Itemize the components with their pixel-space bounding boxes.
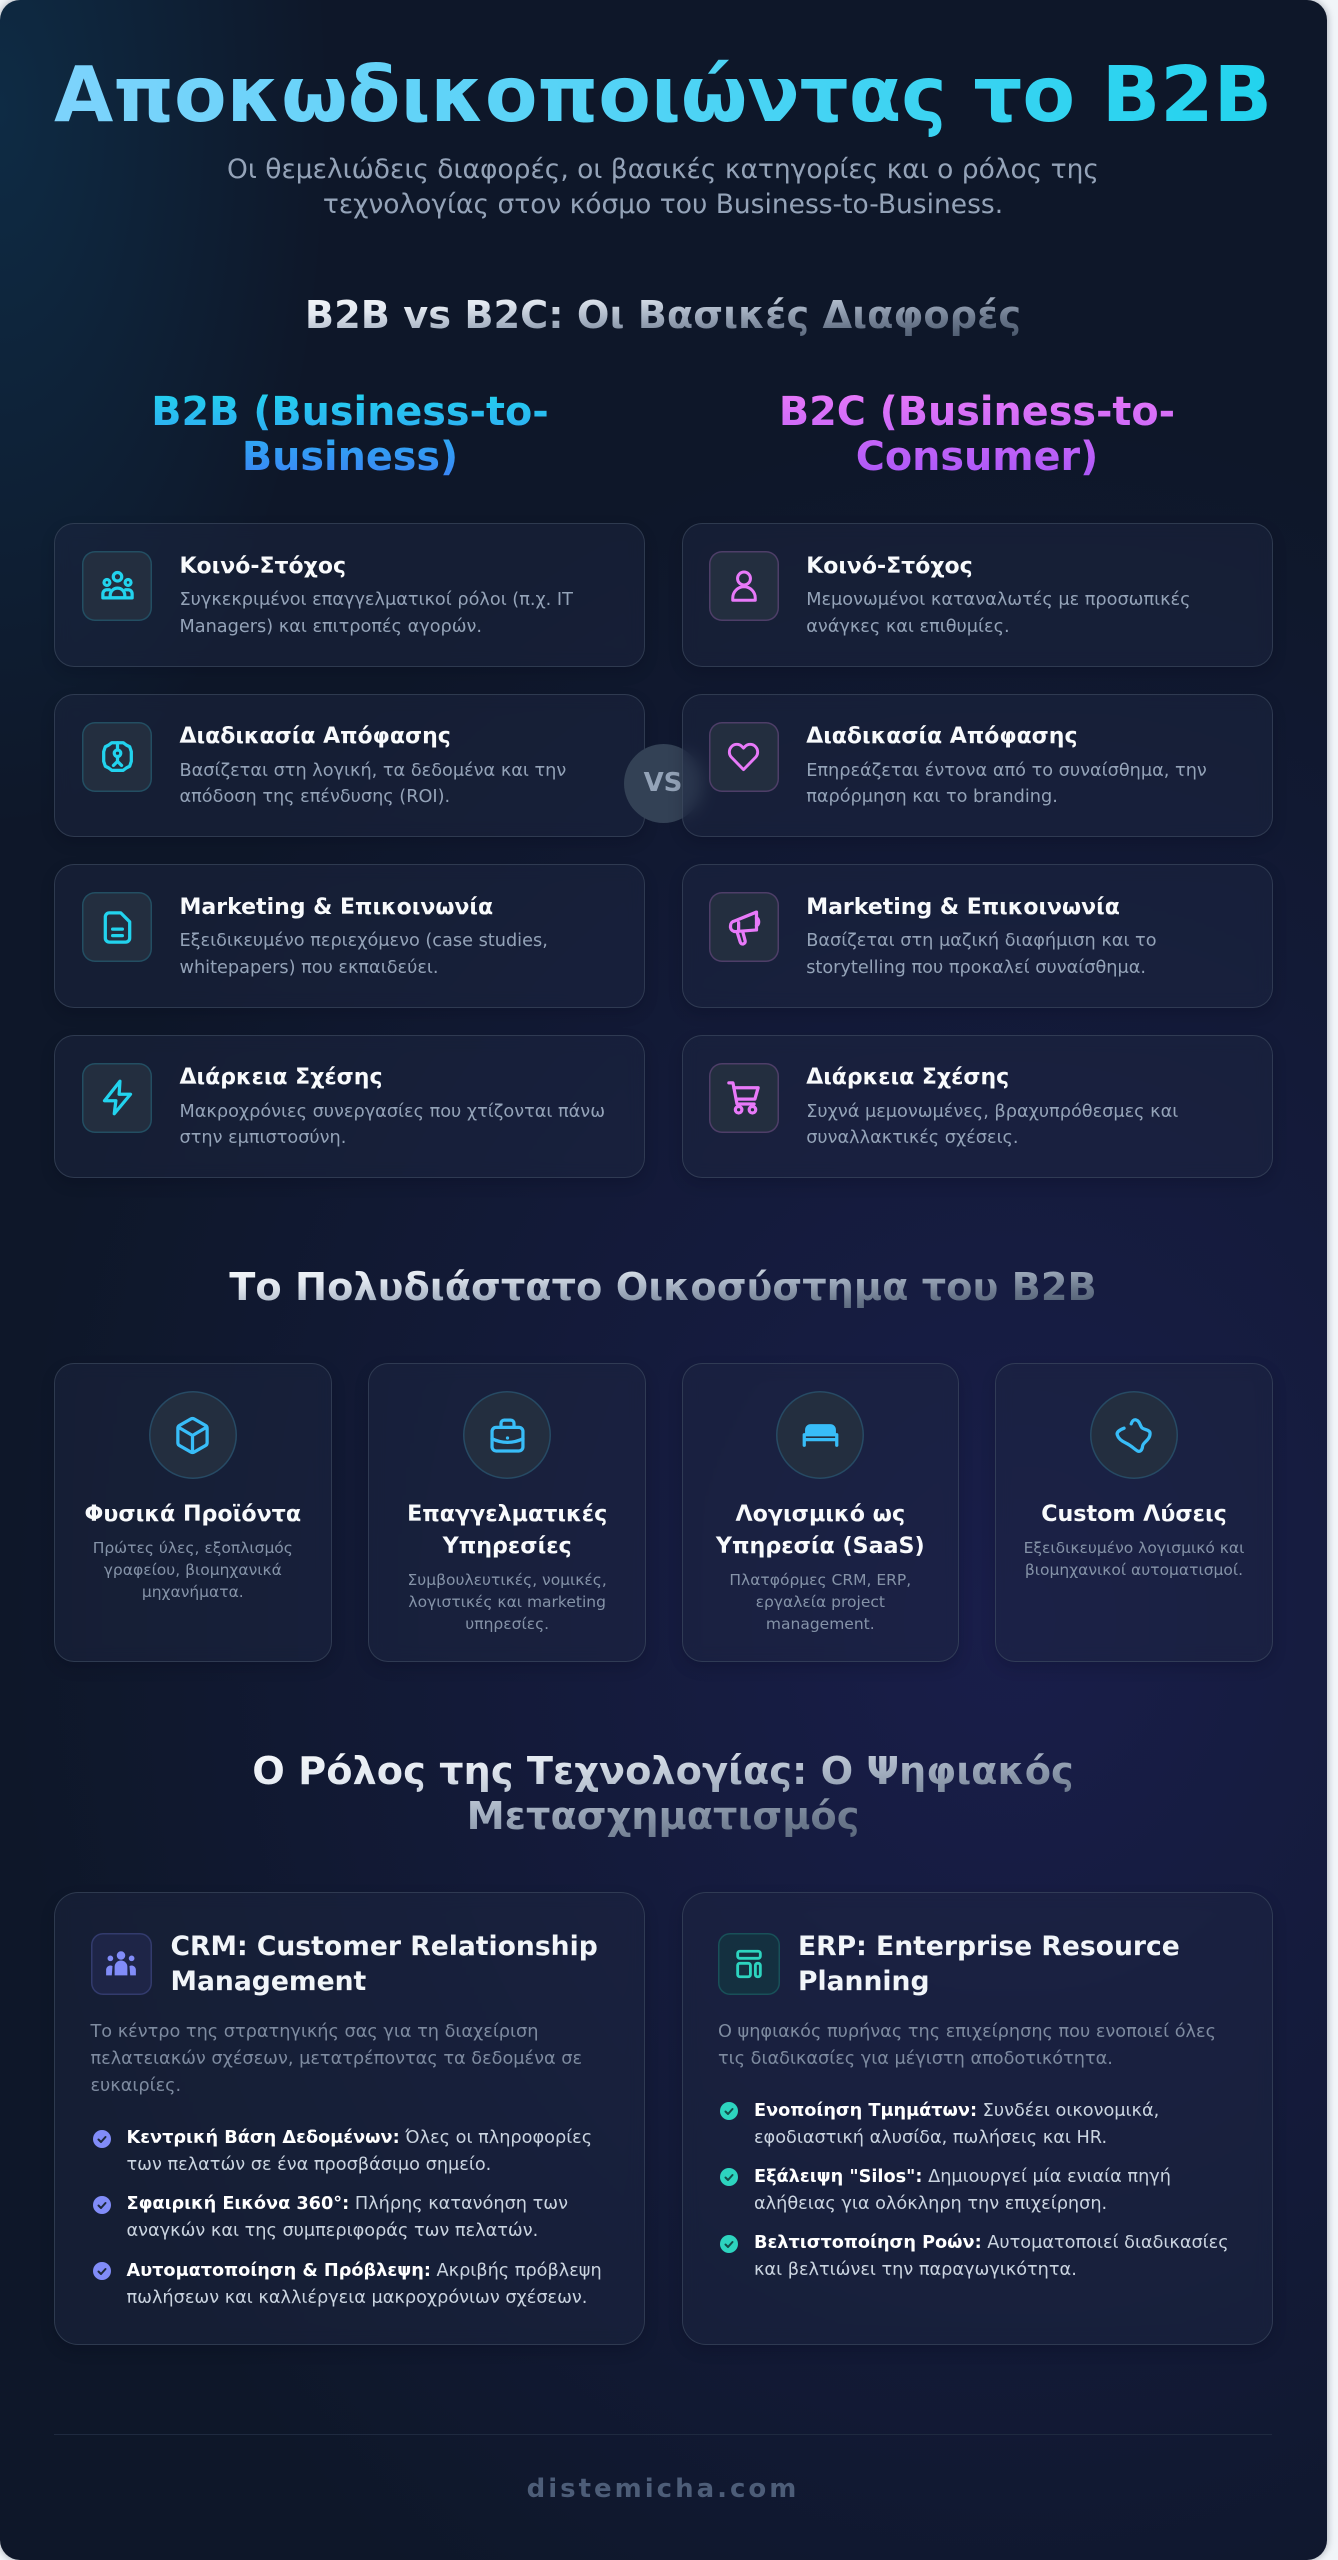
panel description: εργαλεία project: [756, 1593, 885, 1611]
card description: ανάγκες και επιθυμίες.: [806, 617, 1010, 637]
card description: Συχνά μεμονωμένες, βραχυπρόθεσμες και: [806, 1102, 1178, 1122]
heading: ecosystem: Το Πολυδιάστατο Οικοσύστημα του B2B: [229, 1265, 1097, 1310]
CRM heading: [170, 1931, 598, 1997]
panel title: Custom Λύσεις: [1041, 1500, 1227, 1526]
ERP bullet 3: [754, 2233, 1229, 2280]
card: B2B marketing: [54, 864, 645, 1008]
heading: B2B vs B2C: B2B vs B2C: Οι Βασικές Διαφορές: [305, 292, 1021, 338]
icon: custom shape: [1090, 1391, 1178, 1479]
card description: Συγκεκριμένοι επαγγελματικοί ρόλοι (π.χ. IT: [180, 590, 573, 610]
card: B2B decision: [54, 694, 645, 837]
panel: SaaS: [682, 1363, 959, 1662]
card description: Βασίζεται στη λογική, τα δεδομένα και την: [180, 760, 566, 780]
card: B2B audience: [54, 523, 645, 666]
check icon: [93, 2196, 111, 2214]
CRM bullet 3: [126, 2261, 602, 2308]
icon: user: [709, 551, 779, 621]
heading: technology: [252, 1749, 1074, 1839]
panel: CRM: [54, 1892, 645, 2345]
icon: CRM people: [90, 1933, 152, 1995]
heading: B2C column: Consumer): [856, 434, 1098, 480]
panel description: [408, 1571, 607, 1633]
card: B2C decision: [682, 694, 1272, 837]
ERP bullet 1: Ενοποίηση Τμημάτων: Συνδέει οικονομικά,: [754, 2101, 1159, 2121]
check icon: [93, 2262, 111, 2280]
CRM bullet 1: [126, 2128, 592, 2175]
card description: [806, 590, 1190, 637]
icon: megaphone: [709, 892, 779, 962]
subtitle: Οι θεμελιώδεις διαφορές, οι βασικές κατηγορίες και ο ρόλος της: [227, 154, 1099, 184]
card description: [180, 760, 566, 807]
panel description: βιομηχανικοί αυτοματισμοί.: [1025, 1561, 1243, 1579]
CRM bullet 1: Κεντρική Βάση Δεδομένων: Όλες οι πληροφορίες: [126, 2128, 592, 2148]
ERP bullet 3: και βελτιώνει την παραγωγικότητα.: [754, 2260, 1077, 2280]
card description: [806, 931, 1157, 978]
ERP description: [718, 2022, 1216, 2069]
heading: technology: Μετασχηματισμός: [467, 1794, 859, 1839]
card description: συναλλακτικές σχέσεις.: [806, 1128, 1019, 1148]
panel description: λογιστικές και marketing: [408, 1593, 606, 1611]
card title: Marketing & Επικοινωνία: [806, 895, 1120, 920]
card description: παρόρμηση και το branding.: [806, 787, 1058, 807]
heading: B2B column: [151, 390, 549, 480]
CRM description: ευκαιρίες.: [90, 2076, 181, 2096]
subtitle: τεχνολογίας στον κόσμο του Business-to-Business.: [323, 188, 1003, 220]
panel description: υπηρεσίες.: [465, 1615, 549, 1633]
CRM heading: CRM: Customer Relationship: [170, 1931, 598, 1962]
panel description: Εξειδικευμένο λογισμικό και: [1024, 1539, 1244, 1557]
ERP bullet 3: Βελτιστοποίηση Ροών: Αυτοματοποιεί διαδικασίες: [754, 2233, 1229, 2253]
icon: cloud app: [776, 1391, 864, 1479]
card description: [180, 590, 573, 637]
panel: professional services: [368, 1363, 646, 1662]
CRM heading: Management: [170, 1966, 366, 1997]
panel description: μηχανήματα.: [142, 1583, 244, 1601]
panel description: management.: [766, 1615, 875, 1633]
icon: heart: [709, 722, 779, 792]
card title: Marketing & Επικοινωνία: [180, 895, 493, 920]
card title: Διαδικασία Απόφασης: [806, 724, 1078, 749]
card description: Μεμονωμένοι καταναλωτές με προσωπικές: [806, 590, 1190, 610]
ERP bullet 2: Εξάλειψη "Silos": Δημιουργεί μία ενιαία πηγή: [754, 2167, 1171, 2187]
VS badge: [624, 744, 702, 823]
card description: Μακροχρόνιες συνεργασίες που χτίζονται πάνω: [180, 1102, 605, 1122]
check icon: [93, 2130, 111, 2148]
card: B2C relationship: [682, 1034, 1272, 1178]
CRM bullet 3: πωλήσεων και καλλιέργεια μακροχρόνιων σχέσεων.: [126, 2288, 587, 2308]
panel: ERP: [682, 1892, 1272, 2345]
heading: B2C column: B2C (Business-to-: [779, 389, 1175, 435]
card description: [806, 760, 1207, 807]
CRM bullet 3: Αυτοματοποίηση & Πρόβλεψη: Ακριβής πρόβλεψη: [126, 2261, 602, 2281]
CRM bullet 2: Σφαιρική Εικόνα 360°: Πλήρης κατανόηση των: [126, 2194, 568, 2214]
ERP description: Ο ψηφιακός πυρήνας της επιχείρησης που ενοποιεί όλες: [718, 2022, 1216, 2042]
panel title: [407, 1500, 607, 1558]
panel description: [729, 1571, 911, 1633]
CRM description: πελατειακών σχέσεων, μετατρέποντας τα δεδομένα σε: [90, 2049, 582, 2069]
card title: Κοινό-Στόχος: [806, 554, 973, 579]
icon: ERP layout: [718, 1933, 780, 1995]
check icon: [720, 2235, 738, 2253]
icon: shopping cart: [709, 1062, 779, 1132]
ERP bullet 2: αλήθειας για ολόκληρη την επιχείρηση.: [754, 2194, 1107, 2214]
card title: Κοινό-Στόχος: [180, 554, 346, 579]
icon: briefcase: [463, 1391, 551, 1479]
subtitle: [227, 154, 1099, 220]
panel description: Πρώτες ύλες, εξοπλισμός: [93, 1539, 293, 1557]
card description: στην εμπιστοσύνη.: [180, 1128, 346, 1148]
panel description: Πλατφόρμες CRM, ERP,: [729, 1571, 911, 1589]
card description: Επηρεάζεται έντονα από το συναίσθημα, την: [806, 760, 1207, 780]
CRM description: [90, 2022, 582, 2096]
card description: Βασίζεται στη μαζική διαφήμιση και το: [806, 931, 1157, 951]
check icon: [720, 2168, 738, 2186]
card description: απόδοση της επένδυσης (ROI).: [180, 787, 450, 807]
ERP heading: [798, 1931, 1180, 1997]
icon: brain: [82, 722, 152, 792]
panel: physical products: [54, 1363, 332, 1662]
ERP bullet 1: εφοδιαστική αλυσίδα, πωλήσεις και HR.: [754, 2128, 1107, 2148]
panel: custom solutions: [995, 1363, 1273, 1662]
VS badge: VS: [644, 768, 682, 798]
card: B2C audience: [682, 523, 1272, 666]
ERP description: τις διαδικασίες για μέγιστη αποδοτικότητα.: [718, 2049, 1113, 2069]
CRM description: Το κέντρο της στρατηγικής σας για τη διαχείριση: [90, 2022, 538, 2042]
ERP heading: Planning: [798, 1966, 930, 1997]
panel description: Συμβουλευτικές, νομικές,: [408, 1571, 607, 1589]
check icon: [720, 2102, 738, 2120]
card title: Διαδικασία Απόφασης: [180, 724, 451, 749]
panel title: Φυσικά Προϊόντα: [84, 1500, 301, 1526]
card: B2B relationship: [54, 1034, 645, 1178]
card description: whitepapers) που εκπαιδεύει.: [180, 958, 438, 978]
footer brand: distemicha.com: [527, 2474, 799, 2504]
panel title: Λογισμικό ως: [736, 1500, 905, 1526]
heading: B2B column: Business): [242, 434, 458, 480]
heading: technology: Ο Ρόλος της Τεχνολογίας: Ο Ψηφιακός: [252, 1749, 1074, 1794]
icon: user group: [82, 551, 152, 621]
panel description: [1024, 1539, 1244, 1579]
card title: Διάρκεια Σχέσης: [180, 1065, 382, 1090]
heading: B2C column: [779, 390, 1175, 480]
CRM bullet 1: των πελατών σε ένα προσβάσιμο σημείο.: [126, 2155, 491, 2175]
card description: Managers) και επιτροπές αγορών.: [180, 617, 482, 637]
panel title: Υπηρεσίες: [443, 1532, 572, 1558]
icon: document: [82, 892, 152, 962]
panel description: [93, 1539, 293, 1601]
ERP heading: ERP: Enterprise Resource: [798, 1931, 1180, 1962]
card description: [180, 931, 548, 978]
card description: [806, 1102, 1178, 1148]
panel title: Επαγγελματικές: [407, 1500, 607, 1526]
card description: [180, 1102, 605, 1148]
heading: B2B column: B2B (Business-to-: [151, 389, 549, 435]
title: Αποκωδικοποιώντας το B2B: [54, 50, 1272, 140]
card: B2C marketing: [682, 864, 1272, 1008]
CRM bullet 2: αναγκών και της συμπεριφοράς των πελατών.: [126, 2221, 538, 2241]
panel title: [716, 1500, 925, 1558]
icon: lightning bolt: [82, 1062, 152, 1132]
panel title: Υπηρεσία (SaaS): [716, 1532, 925, 1558]
ERP bullet 1: [754, 2101, 1159, 2148]
card description: storytelling που προκαλεί συναίσθημα.: [806, 958, 1146, 978]
CRM bullet 2: [126, 2194, 568, 2241]
panel description: γραφείου, βιομηχανικά: [104, 1561, 282, 1579]
ERP bullet 2: [754, 2167, 1171, 2214]
card title: Διάρκεια Σχέσης: [806, 1065, 1009, 1090]
card description: Εξειδικευμένο περιεχόμενο (case studies,: [180, 931, 548, 951]
icon: box: [149, 1391, 237, 1479]
